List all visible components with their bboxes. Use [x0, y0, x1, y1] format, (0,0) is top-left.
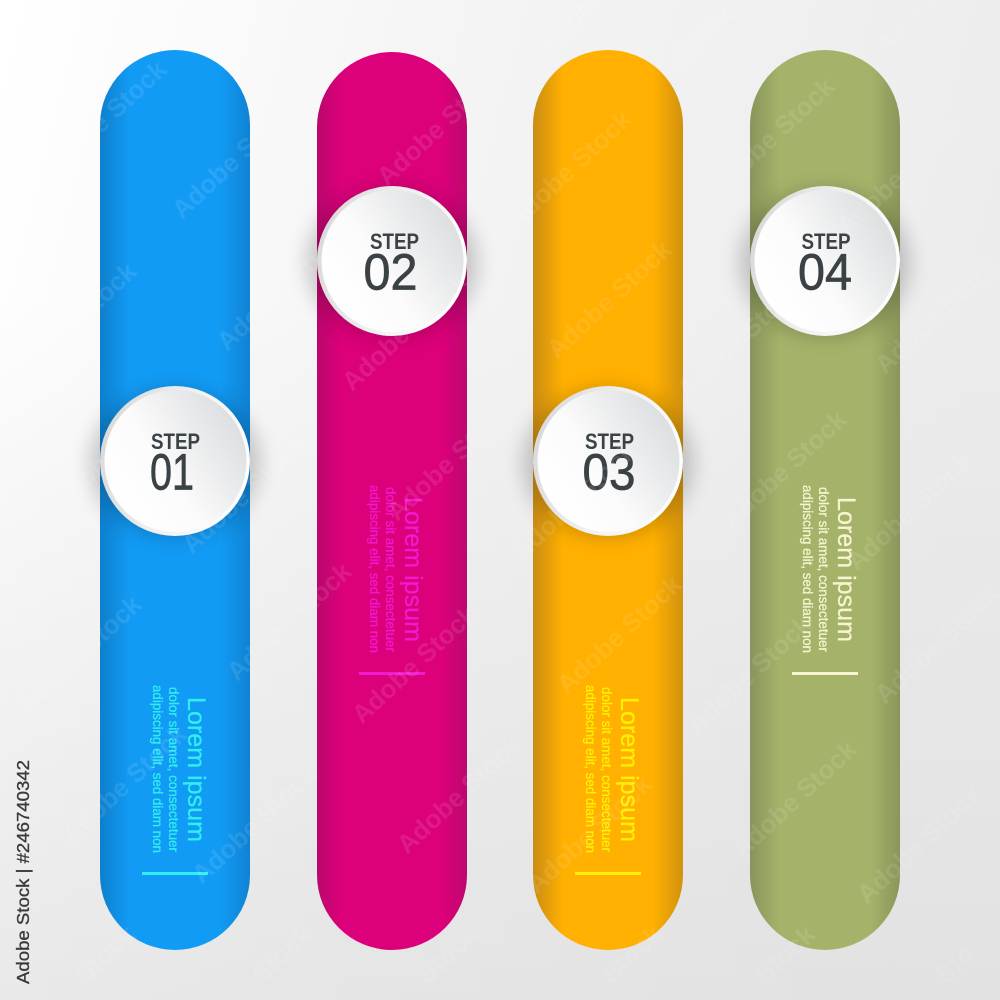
- panel: step 03 yellow pill: [533, 50, 683, 950]
- watermark pattern: Adobe Stock: [551, 569, 688, 699]
- icon: step 03 badge: [523, 386, 693, 537]
- watermark pattern: Adobe Stock: [501, 104, 638, 234]
- callout: step 02 text: [359, 485, 427, 675]
- watermark pattern: Stock: [749, 919, 821, 989]
- callout: step 04 text: dolor sit amet, consectetuer: [816, 487, 831, 652]
- icon: step 01 badge: 01: [150, 444, 194, 500]
- watermark pattern: Adobe Stock: [831, 111, 968, 241]
- callout: step 03 text: Lorem ipsum: [615, 697, 643, 842]
- callout: step 01 text: Lorem ipsum: [182, 697, 210, 842]
- callout: step 03 text: dolor sit amet, consectetuer: [599, 687, 614, 852]
- watermark pattern: Stock: [596, 919, 668, 989]
- watermark pattern: Adobe Stock: [716, 404, 853, 534]
- watermark pattern: Adobe Stock: [851, 779, 988, 909]
- watermark pattern: Adobe Stock: [391, 729, 528, 859]
- panel: step 02 pink pill: [317, 52, 467, 950]
- watermark pattern: Adobe Stock: [704, 71, 841, 201]
- callout: step 01 text: adipiscing elit, sed diam non: [150, 685, 165, 853]
- watermark pattern: Adobe Stock: [346, 599, 483, 729]
- watermark pattern: Adobe Stock: [166, 94, 303, 224]
- icon: step 01 badge: [90, 386, 260, 537]
- watermark pattern: Adobe Stock: [841, 446, 978, 576]
- watermark pattern: Adobe Stock: [371, 61, 508, 191]
- watermark pattern: Adobe Stock: [336, 266, 473, 396]
- callout: step 02 text: adipiscing elit, sed diam non: [367, 485, 382, 653]
- callout: step 01 text: dolor sit amet, consectetuer: [166, 687, 181, 852]
- panel: step 04 green pill: [750, 50, 900, 950]
- watermark pattern: Sto: [929, 939, 980, 989]
- icon: step 02 badge: 02: [364, 244, 418, 300]
- watermark pattern: Adobe Stock: [186, 759, 323, 889]
- watermark pattern: Adobe Stock: [11, 589, 148, 719]
- watermark pattern: Adobe Stock: [521, 769, 658, 899]
- icon: step 04 badge: [740, 186, 910, 337]
- watermark pattern: Adobe Stock: [221, 556, 358, 686]
- watermark pattern: Adobe Stock: [36, 54, 173, 184]
- watermark pattern: Adobe Stock: [211, 226, 348, 356]
- callout: step 04 text: adipiscing elit, sed diam non: [800, 485, 815, 653]
- watermark pattern: Adobe Stock: [726, 734, 863, 864]
- watermark pattern: Stock: [246, 919, 318, 989]
- panel: step 01 blue pill: [100, 50, 250, 950]
- icon: step 04 badge: STEP: [802, 229, 850, 254]
- text block: stock id: Adobe Stock | #246740342: [13, 760, 33, 984]
- watermark pattern: Adobe Stock: [671, 274, 808, 404]
- watermark pattern: Adobe Stock: [681, 609, 818, 739]
- callout: step 03 text: [575, 685, 643, 875]
- icon: step 03 badge: STEP: [585, 429, 634, 454]
- watermark pattern: Stock: [412, 919, 484, 989]
- callout: step 03 text: adipiscing elit, sed diam non: [583, 685, 598, 853]
- callout: step 02 text: dolor sit amet, consectetuer: [383, 487, 398, 652]
- icon: step 03 badge: 03: [582, 444, 636, 500]
- watermark pattern: Adobe Stock: [506, 436, 643, 566]
- icon: step 04 badge: 04: [798, 244, 852, 300]
- watermark pattern: Adobe Stock: [6, 256, 143, 386]
- icon: step 01 badge: STEP: [151, 429, 200, 454]
- watermark pattern: Adobe Stock: [56, 719, 193, 849]
- watermark pattern: Adobe Stock: [176, 429, 313, 559]
- callout: step 04 text: Lorem ipsum: [832, 497, 860, 642]
- icon: step 02 badge: [307, 186, 477, 337]
- watermark pattern: Adobe Stock: [541, 234, 678, 364]
- icon: step 02 badge: STEP: [370, 229, 419, 254]
- callout: step 04 text: [792, 485, 860, 675]
- watermark pattern: Adobe Stock: [381, 396, 518, 526]
- callout: step 02 text: Lorem ipsum: [399, 497, 427, 642]
- watermark pattern: Adobe Stock: [46, 386, 183, 516]
- callout: step 01 text: [142, 685, 210, 875]
- watermark pattern: Stock: [69, 919, 141, 989]
